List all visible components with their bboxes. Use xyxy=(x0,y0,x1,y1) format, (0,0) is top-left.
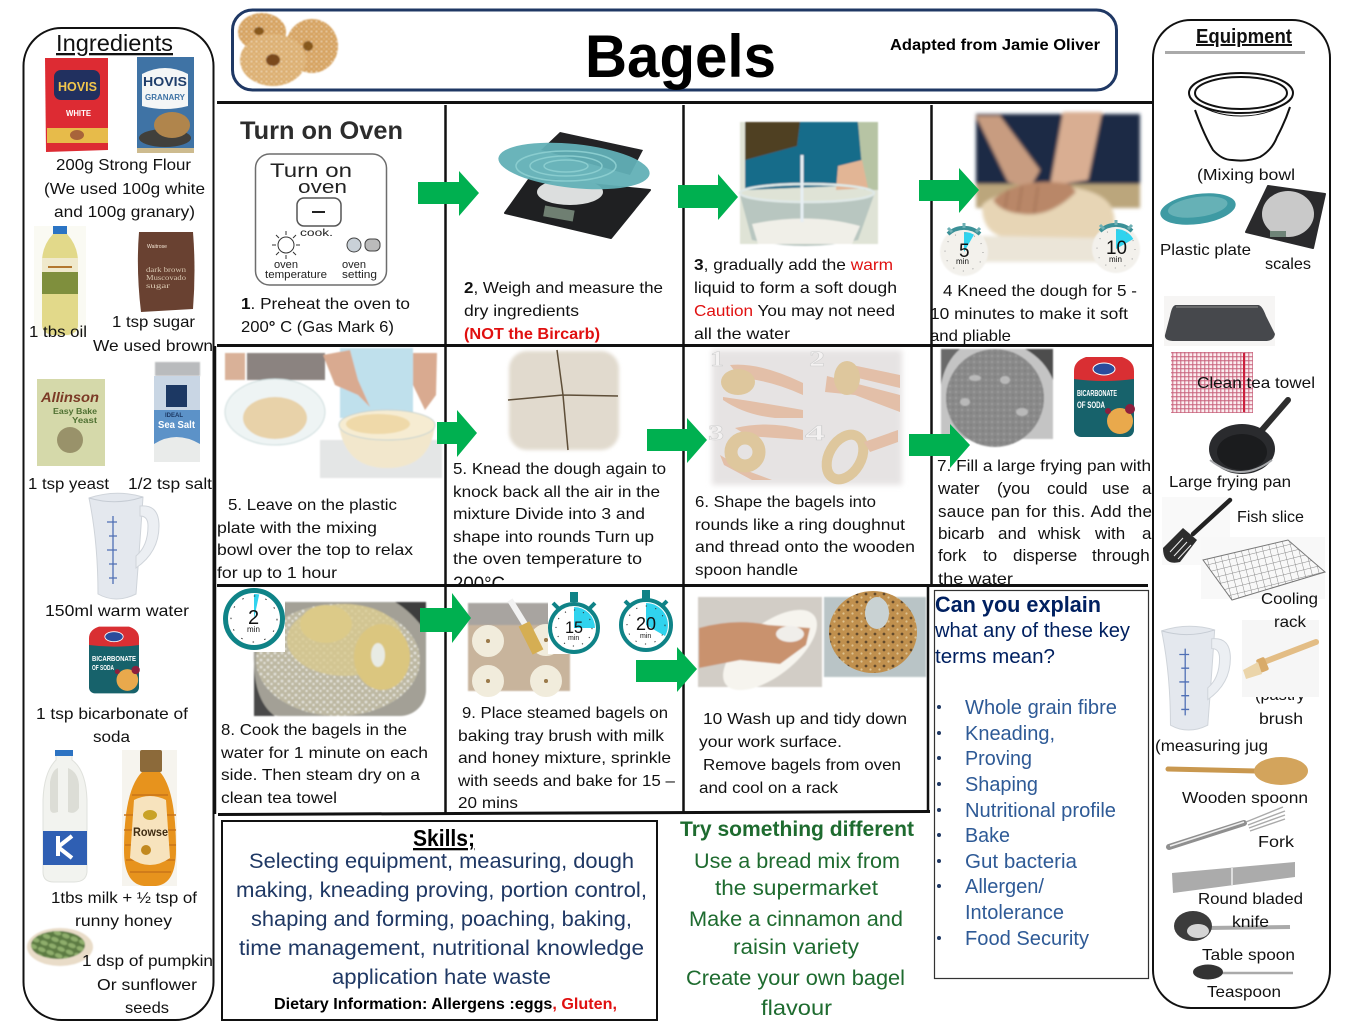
image: granary flour xyxy=(137,57,194,153)
label: fish slice: Fish slice xyxy=(1237,509,1304,526)
label: round bladed knife xyxy=(1174,891,1303,941)
step 7 xyxy=(937,458,1152,588)
image: bicarbonate tub xyxy=(1074,357,1135,437)
panel: arrows xyxy=(418,168,979,692)
label: pastry brush (partly hidden): brush xyxy=(1259,711,1303,728)
key terms heading: Can you explain xyxy=(935,592,1101,617)
image: milk xyxy=(43,750,87,882)
image: brown sugar: Muscovado xyxy=(146,274,187,282)
skills text xyxy=(236,850,647,989)
step 9: and honey mixture, sprinkle xyxy=(458,750,671,767)
label: milk and honey: 1tbs milk + ½ tsp of xyxy=(51,890,198,907)
step 6: rounds like a ring doughnut xyxy=(695,517,906,534)
timer: 20 min: min xyxy=(640,633,651,640)
label: plastic plate: Plastic plate xyxy=(1160,242,1251,259)
image: turn on oven card: Turn on xyxy=(270,161,352,182)
heading rule xyxy=(1165,51,1305,54)
step 10: your work surface. xyxy=(699,734,842,751)
image: sea salt: IDEAL xyxy=(165,413,183,419)
step 8: 8. Cook the bagels in the xyxy=(221,722,407,739)
image: turn on oven card: oven xyxy=(298,177,347,197)
step 6: spoon handle xyxy=(695,562,798,579)
step 7: water xyxy=(937,479,980,498)
step 7: bicarb xyxy=(938,524,984,543)
image: bicarbonate tub: BICARBONATE xyxy=(1077,389,1117,398)
image: shaping bagels: 3 xyxy=(708,420,724,445)
image: washing up xyxy=(698,595,830,705)
dietary information: Dietary Information: Allergens :eggs, Gluten, xyxy=(274,996,617,1013)
step 3: all the water xyxy=(694,326,791,343)
image: oil bottle xyxy=(34,226,86,336)
step 3 xyxy=(694,257,897,343)
step 1: 1. Preheat the oven to xyxy=(241,296,410,313)
try suggestions xyxy=(686,850,905,1020)
step 2: (NOT the Bircarb) xyxy=(464,326,600,343)
image: brown sugar: dark brown xyxy=(146,266,187,274)
step 1 xyxy=(241,296,410,336)
skills text: Selecting equipment, measuring, dough xyxy=(249,850,634,873)
image: yeast: Yeast xyxy=(72,416,97,425)
label: mixing bowl: (Mixing bowl xyxy=(1197,167,1295,184)
timer: 2 min: 2 xyxy=(248,607,259,629)
image: turn on oven card: setting xyxy=(342,269,377,281)
step 6 xyxy=(695,494,915,579)
arrow 4 xyxy=(437,410,477,457)
label: bicarbonate: soda xyxy=(93,729,130,746)
timer: 5 min xyxy=(940,223,988,276)
step 4: and pliable xyxy=(930,328,1011,345)
step 10 xyxy=(699,711,907,797)
arrow 7 xyxy=(420,593,471,643)
icon: teaspoon xyxy=(1193,964,1293,980)
image: turn on oven card xyxy=(256,154,386,285)
step 7: with xyxy=(1094,524,1125,543)
icon: plastic plate xyxy=(1158,189,1238,229)
step 9: 9. Place steamed bagels on xyxy=(462,705,668,722)
label: measuring jug: (measuring jug xyxy=(1155,738,1268,755)
timer: 5 min: 5 xyxy=(959,241,970,262)
label: salt: 1/2 tsp salt xyxy=(128,476,213,493)
label: seeds: Or sunflower xyxy=(97,977,198,994)
panel: recipe steps text xyxy=(217,117,1152,812)
timer: 15 min xyxy=(548,592,602,654)
icon: scales xyxy=(1246,186,1325,248)
step 7: and xyxy=(998,524,1026,543)
step 5: knead again: knock back all the air in the xyxy=(453,484,660,501)
step 5: knead again: 200°C xyxy=(453,574,505,595)
image: finished bagel xyxy=(824,591,926,677)
step 9: 20 mins xyxy=(458,795,518,812)
step 7: to xyxy=(983,546,997,565)
step 8 xyxy=(220,722,428,807)
image: measuring jug xyxy=(89,493,159,599)
icon: tea towel xyxy=(1171,352,1253,413)
panel: equipment xyxy=(1153,20,1330,1008)
key terms list: Intolerance xyxy=(965,902,1064,924)
step 2 xyxy=(464,280,663,343)
image: turn on oven card: oven xyxy=(342,259,366,271)
image: bicarbonate of soda: BICARBONATE xyxy=(92,656,136,663)
image: sea salt: Sea Salt xyxy=(158,420,196,431)
step 2: dry ingredients xyxy=(464,303,579,320)
step 8: side. Then steam dry on a xyxy=(221,767,420,784)
try suggestions: Use a bread mix from xyxy=(694,850,900,873)
step 7: 7. Fill a large frying pan with xyxy=(937,458,1151,475)
skills text: shaping and forming, poaching, baking, xyxy=(251,908,632,931)
step 5: leave to relax: bowl over the top to relax xyxy=(217,542,413,559)
image: yeast xyxy=(37,379,105,466)
step 5: leave to relax xyxy=(217,497,413,582)
label: round bladed knife: Round bladed xyxy=(1198,891,1303,908)
label: yeast: 1 tsp yeast xyxy=(28,476,110,493)
skills text: application hate waste xyxy=(332,966,551,989)
timer: 20 min xyxy=(621,590,671,650)
skills text: time management, nutritional knowledge xyxy=(239,937,644,960)
panel: timers xyxy=(223,220,1140,654)
key terms list xyxy=(965,697,1117,950)
label: frying pan: Large frying pan xyxy=(1169,474,1291,491)
timer: 15 min: 15 xyxy=(565,618,583,637)
image: brown sugar xyxy=(138,232,194,312)
label: tea towel: Clean tea towel xyxy=(1197,375,1315,392)
arrow 5 xyxy=(647,418,707,463)
arrow 3 xyxy=(919,168,979,213)
label: pastry brush (partly hidden): (pastry xyxy=(1255,687,1305,704)
step 10: Remove bagels from oven xyxy=(703,757,901,774)
image: granary flour: HOVIS xyxy=(143,74,187,89)
image: brown sugar: sugar xyxy=(146,282,171,290)
step 10: and cool on a rack xyxy=(699,780,839,797)
image: honey xyxy=(122,750,177,886)
label: oil: 1 tbs oil xyxy=(29,324,87,341)
panel: key terms xyxy=(934,590,1148,978)
icon: fork xyxy=(1169,807,1285,847)
label: cooling rack xyxy=(1261,591,1318,631)
heading: ingredients: Ingredients xyxy=(56,30,173,56)
step 10: 10 Wash up and tidy down xyxy=(703,711,907,728)
try suggestions: Make a cinnamon and xyxy=(689,908,903,931)
label: scales: scales xyxy=(1265,256,1311,273)
step 2: 2, Weigh and measure the xyxy=(464,280,663,297)
label: sugar: 1 tsp sugar xyxy=(112,314,196,331)
arrow 2 xyxy=(678,174,738,220)
timer: 2 min xyxy=(223,590,285,652)
step 7: the water xyxy=(938,571,1014,588)
step 5: knead again: 5. Knead the dough again to xyxy=(453,461,666,478)
icon: round bladed knife xyxy=(1172,862,1295,893)
label: seeds xyxy=(82,953,213,1017)
step 9 xyxy=(457,705,675,812)
timer: 10 min xyxy=(1092,220,1140,273)
arrow 8 xyxy=(636,647,697,692)
timer: 5 min: min xyxy=(956,257,969,266)
label: bicarbonate: 1 tsp bicarbonate of xyxy=(36,706,189,723)
step 6: 6. Shape the bagels into xyxy=(695,494,876,511)
step 5: leave to relax: for up to 1 hour xyxy=(217,565,338,582)
image: bagels on tray xyxy=(468,600,570,691)
image: water in pan xyxy=(941,349,1053,447)
icon: wooden spoon xyxy=(1168,757,1308,785)
step 5: leave to relax: plate with the mixing xyxy=(217,520,377,537)
step 3: Caution You may not need xyxy=(694,303,895,320)
icon: table spoon xyxy=(1174,911,1290,941)
image: bicarbonate of soda xyxy=(89,627,140,693)
skills text: making, kneading proving, portion control, xyxy=(236,879,647,902)
step 7: use xyxy=(1102,479,1129,498)
image: shaping bagels xyxy=(708,346,902,486)
timer: 10 min: min xyxy=(1109,255,1122,264)
key terms heading xyxy=(934,592,1130,668)
key terms list: Proving xyxy=(965,748,1032,770)
icon: measuring jug xyxy=(1162,626,1230,730)
icon: frying pan xyxy=(1209,400,1288,474)
label: table spoon: Table spoon xyxy=(1202,947,1295,964)
step 7: whisk xyxy=(1037,524,1081,543)
arrow 1 xyxy=(418,171,479,216)
image: pouring water into bowl xyxy=(740,122,878,246)
label: milk and honey xyxy=(51,890,198,930)
step 7: fork xyxy=(938,546,967,565)
icon: cooling rack xyxy=(1201,537,1325,600)
label: flour: 200g Strong Flour xyxy=(56,157,192,174)
image: turn on oven card: oven xyxy=(274,259,298,271)
panel: try something different xyxy=(680,818,914,1020)
key terms list: Food Security xyxy=(965,928,1089,950)
label: cooling rack: rack xyxy=(1274,614,1307,631)
label: sugar xyxy=(93,314,213,355)
step 1: 200° C (Gas Mark 6) xyxy=(241,319,394,336)
try suggestions: flavour xyxy=(761,997,832,1020)
step 5: leave to relax: 5. Leave on the plastic xyxy=(228,497,397,514)
image: shaping bagels: 1 xyxy=(710,346,724,371)
key terms list: Whole grain fibre xyxy=(965,697,1117,719)
label: bicarbonate xyxy=(36,706,189,746)
image: pumpkin seeds xyxy=(27,928,93,966)
step 8: clean tea towel xyxy=(221,790,337,807)
key terms list: Bake xyxy=(965,825,1010,847)
image: turn on oven card: cook. xyxy=(300,228,333,239)
label: pastry brush (partly hidden) xyxy=(1255,687,1305,728)
step 6: and thread onto the wooden xyxy=(695,539,915,556)
step 7: through xyxy=(1092,546,1150,565)
title: Bagels xyxy=(585,23,776,90)
panel: recipe step photos xyxy=(225,112,1140,716)
image: kneading dough xyxy=(976,112,1140,262)
step 4 xyxy=(930,283,1137,345)
icon: fish slice xyxy=(1162,497,1230,565)
label: wooden spoon: Wooden spoonn xyxy=(1182,790,1308,807)
panel: skills xyxy=(222,821,657,1020)
label: milk and honey: runny honey xyxy=(75,913,172,930)
image: dough divided in four xyxy=(508,350,619,450)
key terms list: Kneading, xyxy=(965,723,1055,745)
image: dough under plastic bowl xyxy=(225,348,442,478)
step 7: sauce pan for this. Add the xyxy=(938,502,1152,521)
image: yeast: Easy Bake xyxy=(53,407,98,416)
list bullets xyxy=(937,705,941,940)
label: flour xyxy=(44,157,205,221)
step 7: (you xyxy=(997,479,1030,498)
icon: mixing bowl xyxy=(1189,73,1293,161)
skills heading: Skills; xyxy=(413,825,475,851)
heading: equipment: Equipment xyxy=(1196,26,1292,48)
arrow 6 xyxy=(909,424,970,468)
step 5: knead again: shape into rounds Turn up xyxy=(453,529,654,546)
image: boiling water xyxy=(254,602,426,716)
label: seeds: 1 dsp of pumpkin xyxy=(82,953,213,970)
label: sugar: We used brown xyxy=(93,338,213,355)
step 9: baking tray brush with milk xyxy=(458,728,665,745)
image: bicarbonate tub: OF SODA xyxy=(1077,400,1105,410)
key terms list: Nutritional profile xyxy=(965,800,1116,822)
image: white bread flour: WHITE xyxy=(66,109,92,118)
try suggestions: the supermarket xyxy=(715,877,878,900)
label: seeds: seeds xyxy=(125,1000,169,1017)
heading: turn on oven: Turn on Oven xyxy=(240,117,403,145)
image: yeast: Allinson xyxy=(40,389,99,405)
key terms heading: what any of these key xyxy=(934,620,1130,642)
try suggestions: Create your own bagel xyxy=(686,967,905,990)
image: white bread flour xyxy=(45,58,108,152)
image: brown sugar: Waitrose xyxy=(147,244,167,250)
step 7: a xyxy=(1142,479,1152,498)
step 7: disperse xyxy=(1013,546,1077,565)
image: white bread flour: HOVIS xyxy=(58,79,97,94)
step 8: water for 1 minute on each xyxy=(220,745,428,762)
image: shaping bagels: 2 xyxy=(809,346,825,371)
image: sea salt xyxy=(154,362,200,462)
timer: 20 min: 20 xyxy=(636,614,656,634)
step 4: 10 minutes to make it soft xyxy=(930,306,1129,323)
label: water: 150ml warm water xyxy=(45,603,190,620)
icon: pastry brush xyxy=(1242,620,1319,697)
image: honey: Rowse xyxy=(133,825,168,839)
attribution: Adapted from Jamie Oliver xyxy=(890,37,1100,54)
timer: 15 min: min xyxy=(568,635,579,642)
step 3: liquid to form a soft dough xyxy=(694,280,897,297)
try suggestions: raisin variety xyxy=(733,936,860,959)
step 9: with seeds and bake for 15 – xyxy=(457,773,675,790)
image: bicarbonate of soda: OF SODA xyxy=(92,665,114,672)
panel: ingredients xyxy=(24,28,214,1020)
key terms list: Gut bacteria xyxy=(965,851,1078,873)
step 5: knead again: mixture Divide into 3 and xyxy=(453,506,645,523)
label: fork: Fork xyxy=(1258,834,1295,851)
label: cooling rack: Cooling xyxy=(1261,591,1318,608)
step 4: 4 Kneed the dough for 5 - xyxy=(943,283,1137,300)
label: round bladed knife: knife xyxy=(1232,914,1269,931)
label: flour: and 100g granary) xyxy=(54,204,195,221)
label: teaspoon: Teaspoon xyxy=(1207,984,1281,1001)
image: shaping bagels: 4 xyxy=(805,420,825,445)
icon: baking tray xyxy=(1164,296,1275,346)
step 5: knead again: the oven temperature to xyxy=(453,551,642,568)
title banner xyxy=(232,10,1116,90)
key terms list: Allergen/ xyxy=(965,876,1044,898)
image: turn on oven card: temperature xyxy=(265,269,327,281)
grid lines xyxy=(215,102,1153,814)
timer: 2 min: min xyxy=(247,625,260,634)
step 3: 3, gradually add the warm xyxy=(694,257,893,274)
step 5: knead again xyxy=(453,461,666,595)
step 7: could xyxy=(1047,479,1088,498)
image: bagels xyxy=(238,13,338,86)
image: weighing scales xyxy=(496,132,652,238)
try heading: Try something different xyxy=(680,818,914,841)
key terms heading: terms mean? xyxy=(935,646,1055,668)
key terms list: Shaping xyxy=(965,774,1038,796)
label: flour: (We used 100g white xyxy=(44,181,205,198)
image: granary flour: GRANARY xyxy=(145,93,186,102)
step 7: a xyxy=(1142,524,1152,543)
timer: 10 min: 10 xyxy=(1106,238,1127,259)
